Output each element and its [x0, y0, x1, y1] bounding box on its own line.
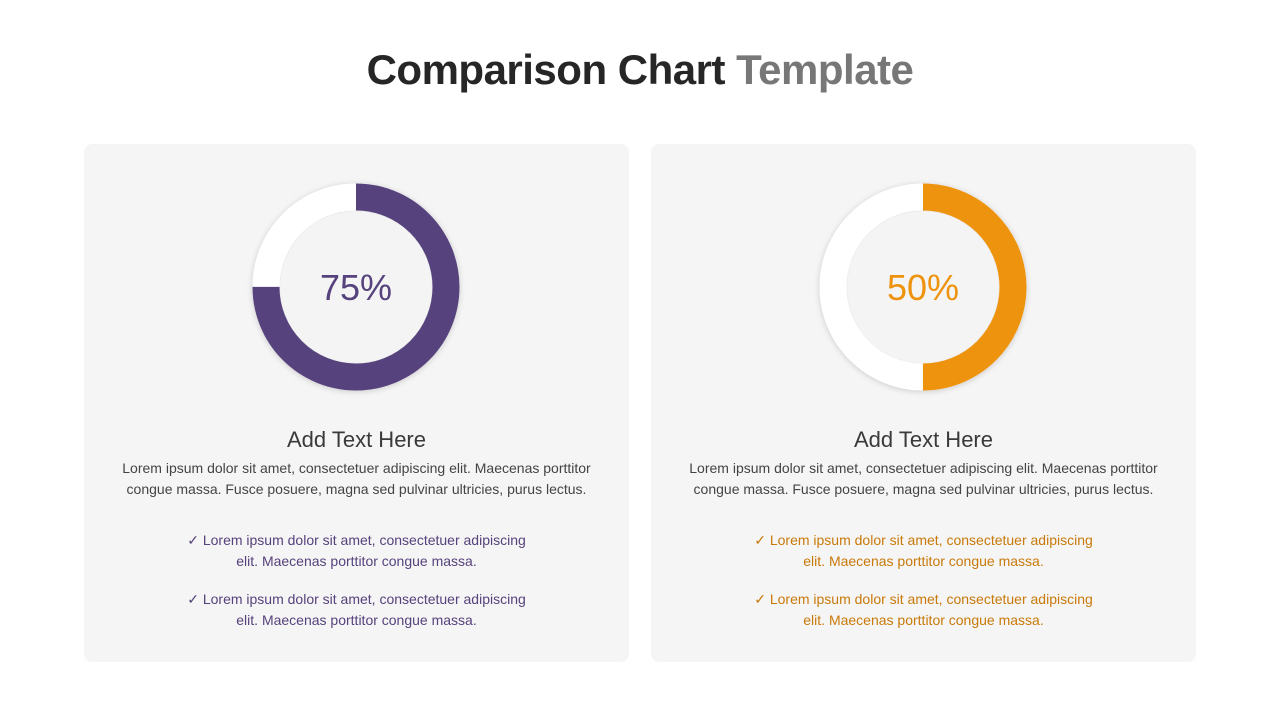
bullet 1: elit. Maecenas porttitor congue massa. — [236, 553, 477, 569]
bullet 2: ✓ Lorem ipsum dolor sit amet, consectetuer adipiscing — [754, 591, 1093, 607]
bullet 2: elit. Maecenas porttitor congue massa. — [803, 612, 1044, 628]
title: Comparison Chart Template — [367, 46, 913, 93]
description — [689, 460, 1158, 497]
bullet 2: elit. Maecenas porttitor congue massa. — [236, 612, 477, 628]
description: congue massa. Fusce posuere, magna sed pulvinar ultricies, purus lectus. — [694, 481, 1153, 497]
panel: right — [651, 144, 1196, 662]
bullet 1: elit. Maecenas porttitor congue massa. — [803, 553, 1044, 569]
description — [122, 460, 591, 497]
bullet 1: ✓ Lorem ipsum dolor sit amet, consectetuer adipiscing — [754, 532, 1093, 548]
donut chart 50%: 50% — [887, 267, 959, 308]
bullet 1 — [187, 532, 526, 569]
donut chart 75% — [250, 182, 462, 394]
bullet 2 — [187, 591, 526, 628]
description: Lorem ipsum dolor sit amet, consectetuer adipiscing elit. Maecenas porttitor — [689, 460, 1158, 476]
heading: Add Text Here — [854, 427, 993, 452]
panel: left — [84, 144, 629, 662]
bullet 2: ✓ Lorem ipsum dolor sit amet, consectetuer adipiscing — [187, 591, 526, 607]
description: congue massa. Fusce posuere, magna sed pulvinar ultricies, purus lectus. — [127, 481, 586, 497]
donut chart 50% — [817, 182, 1029, 394]
bullet 1: ✓ Lorem ipsum dolor sit amet, consectetuer adipiscing — [187, 532, 526, 548]
donut chart 75%: 75% — [320, 267, 392, 308]
bullet 1 — [754, 532, 1093, 569]
description: Lorem ipsum dolor sit amet, consectetuer adipiscing elit. Maecenas porttitor — [122, 460, 591, 476]
heading: Add Text Here — [287, 427, 426, 452]
bullet 2 — [754, 591, 1093, 628]
